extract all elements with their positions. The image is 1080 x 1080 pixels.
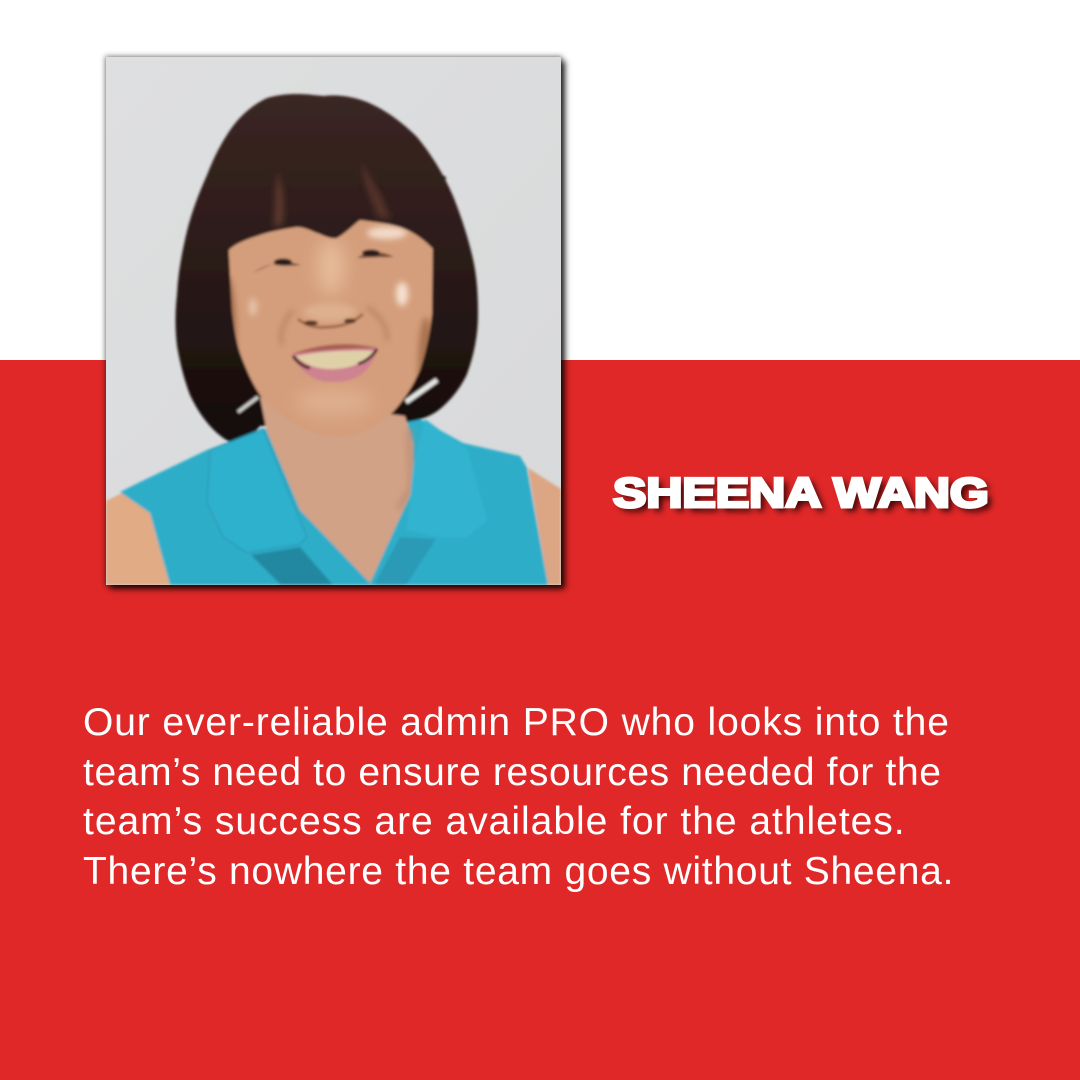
biography text block: There’s nowhere the team goes without Sheena. bbox=[83, 850, 954, 892]
hair bbox=[176, 94, 478, 447]
placket and collar shadow bbox=[251, 547, 333, 585]
fringe bbox=[224, 117, 446, 257]
mouth bbox=[292, 344, 378, 382]
name heading: SHEENA WANG bbox=[613, 469, 989, 516]
photo: portrait of Sheena Wang bbox=[106, 57, 561, 585]
biography text block: Our ever-reliable admin PRO who looks into the bbox=[83, 701, 950, 744]
fringe highlights bbox=[274, 172, 284, 227]
face shading bbox=[228, 278, 240, 343]
biography text block: team’s success are available for the athletes. bbox=[83, 800, 906, 843]
eyes bbox=[253, 262, 301, 273]
earrings bbox=[238, 397, 258, 412]
shirt bbox=[120, 419, 548, 585]
neck bbox=[260, 397, 413, 583]
nose bbox=[304, 303, 356, 321]
red background band bbox=[0, 360, 1080, 1080]
biography text block bbox=[83, 701, 954, 892]
face bbox=[226, 218, 435, 436]
arms bbox=[106, 485, 170, 585]
collars bbox=[207, 429, 307, 553]
biography text block: team’s need to ensure resources needed for the bbox=[83, 750, 942, 794]
